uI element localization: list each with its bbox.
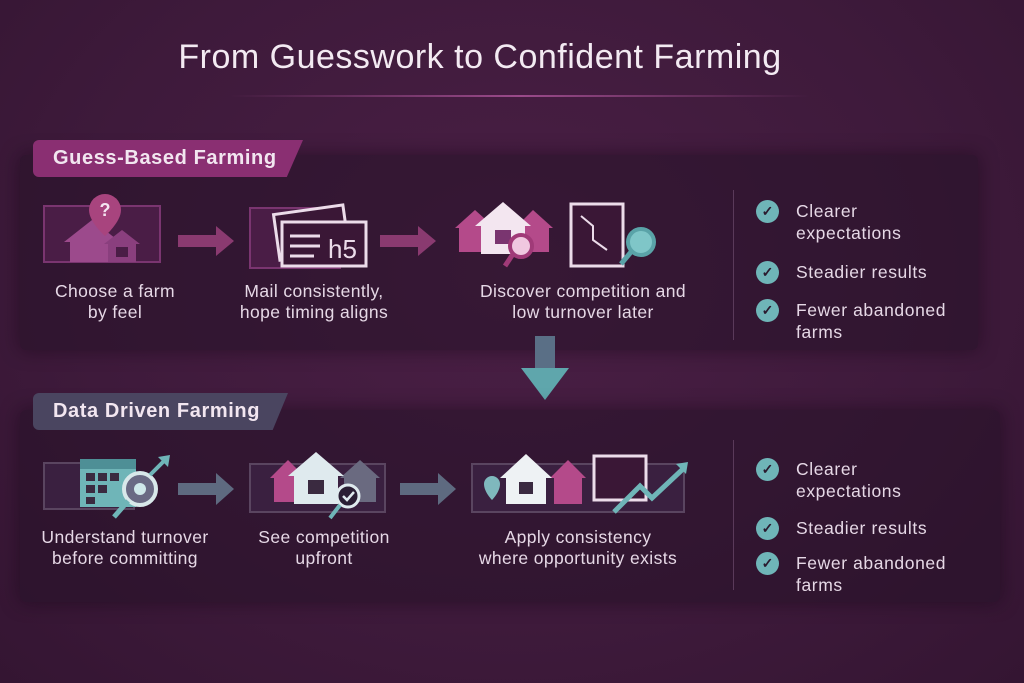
- text: where opportunity exists: [479, 548, 677, 568]
- text: low turnover later: [512, 302, 654, 322]
- checklist 1: Clearer: [796, 201, 858, 221]
- labels row 1: Choose a farm: [55, 281, 175, 301]
- icon: calendar with magnifier: [43, 455, 170, 519]
- icon: houses and map with magnifiers: [455, 202, 656, 268]
- text: Apply consistency: [505, 527, 651, 547]
- checklist 1: farms: [796, 322, 843, 342]
- text: ✓: [762, 264, 773, 280]
- checklist 2: Steadier results: [796, 518, 927, 538]
- checklist 1: Steadier results: [796, 262, 927, 282]
- title: From Guesswork to Confident Farming: [178, 38, 782, 76]
- text: Mail consistently,: [244, 281, 384, 301]
- labels row 1: [55, 281, 175, 322]
- text: ✓: [762, 203, 773, 219]
- panel: data driven farming: [20, 410, 1000, 602]
- icon: house with question pin: [43, 194, 161, 263]
- labels row 1: by feel: [88, 302, 142, 322]
- checklist 1: Fewer abandoned: [796, 300, 946, 320]
- text: See competition: [258, 527, 390, 547]
- heading: Data Driven Farming: [33, 393, 288, 430]
- text: ✓: [762, 555, 773, 571]
- icon: mailers: h5: [328, 234, 357, 264]
- arrow: [178, 473, 234, 505]
- text: hope timing aligns: [240, 302, 388, 322]
- icon: mailers: [249, 203, 368, 269]
- icon: house with question pin: ?: [100, 200, 110, 220]
- icon: houses with check magnifier: [249, 452, 386, 520]
- heading: Guess-Based Farming: Guess-Based Farming: [53, 147, 277, 169]
- labels row 2: before committing: [52, 548, 198, 568]
- text: Discover competition and: [480, 281, 686, 301]
- arrow: [178, 226, 234, 256]
- checklist 2: [756, 458, 946, 595]
- checklist 1: [756, 200, 946, 342]
- heading: Guess-Based Farming: [33, 140, 303, 177]
- checklist 2: Clearer: [796, 459, 858, 479]
- text: upfront: [295, 548, 353, 568]
- checklist 2: Fewer abandoned: [796, 553, 946, 573]
- arrow: [400, 473, 456, 505]
- checklist 1: expectations: [796, 223, 901, 243]
- panel: guess-based farming: [20, 155, 978, 350]
- heading: Data Driven Farming: Data Driven Farming: [53, 400, 260, 422]
- text: ✓: [762, 302, 773, 318]
- icon: houses, map and growth chart: [471, 454, 688, 514]
- labels row 2: [41, 527, 209, 568]
- checklist 2: expectations: [796, 481, 901, 501]
- checklist 2: farms: [796, 575, 843, 595]
- text: ✓: [762, 461, 773, 477]
- labels row 2: Understand turnover: [41, 527, 209, 547]
- arrow: down: [521, 336, 569, 400]
- text: ✓: [762, 520, 773, 536]
- arrow: [380, 226, 436, 256]
